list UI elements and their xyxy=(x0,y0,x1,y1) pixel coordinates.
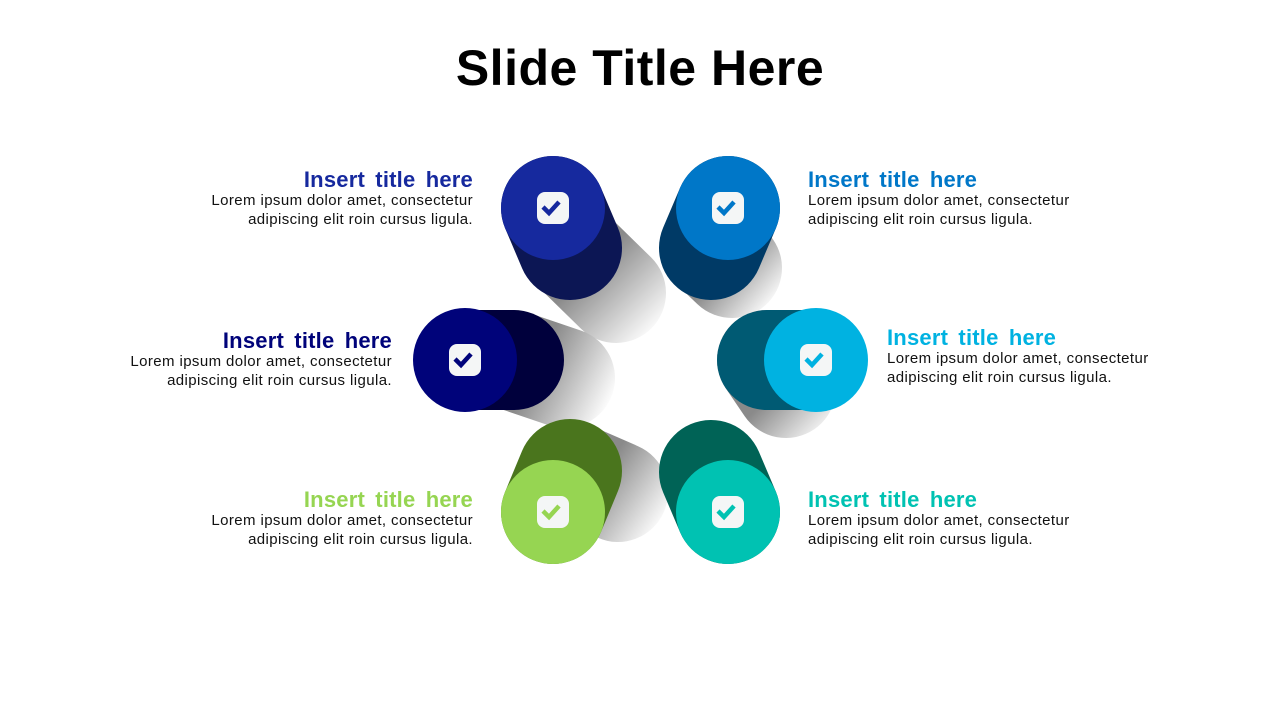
cylinder 1 xyxy=(501,156,605,260)
cylinder 4 xyxy=(764,308,868,412)
cylinder 6 xyxy=(676,460,780,564)
cylinder 5 xyxy=(501,460,605,564)
shadows xyxy=(512,248,786,492)
cylinder 2 xyxy=(676,156,780,260)
text 6: adipiscing elit roin cursus ligula. xyxy=(808,531,1033,548)
text 4: Lorem ipsum dolor amet, consectetur xyxy=(887,350,1149,367)
text 5 xyxy=(211,487,473,548)
text 6 xyxy=(808,487,1070,548)
text 1: Insert title here xyxy=(304,167,473,192)
text 1: adipiscing elit roin cursus ligula. xyxy=(248,211,473,228)
text 3: Lorem ipsum dolor amet, consectetur xyxy=(130,353,392,370)
title: Slide Title Here xyxy=(456,40,824,96)
text 3 xyxy=(130,328,392,389)
text 3: adipiscing elit roin cursus ligula. xyxy=(167,372,392,389)
text 2: Insert title here xyxy=(808,167,977,192)
text 5: Insert title here xyxy=(304,487,473,512)
text 2 xyxy=(808,167,1070,228)
text 6: Insert title here xyxy=(808,487,977,512)
text 4: adipiscing elit roin cursus ligula. xyxy=(887,369,1112,386)
text 6: Lorem ipsum dolor amet, consectetur xyxy=(808,512,1070,529)
text 2: Lorem ipsum dolor amet, consectetur xyxy=(808,192,1070,209)
text 5: adipiscing elit roin cursus ligula. xyxy=(248,531,473,548)
text 4 xyxy=(887,325,1149,386)
text 5: Lorem ipsum dolor amet, consectetur xyxy=(211,512,473,529)
text 2: adipiscing elit roin cursus ligula. xyxy=(808,211,1033,228)
text 1 xyxy=(211,167,473,228)
text 4: Insert title here xyxy=(887,325,1056,350)
cylinder 3 xyxy=(413,308,517,412)
text 1: Lorem ipsum dolor amet, consectetur xyxy=(211,192,473,209)
text 3: Insert title here xyxy=(223,328,392,353)
